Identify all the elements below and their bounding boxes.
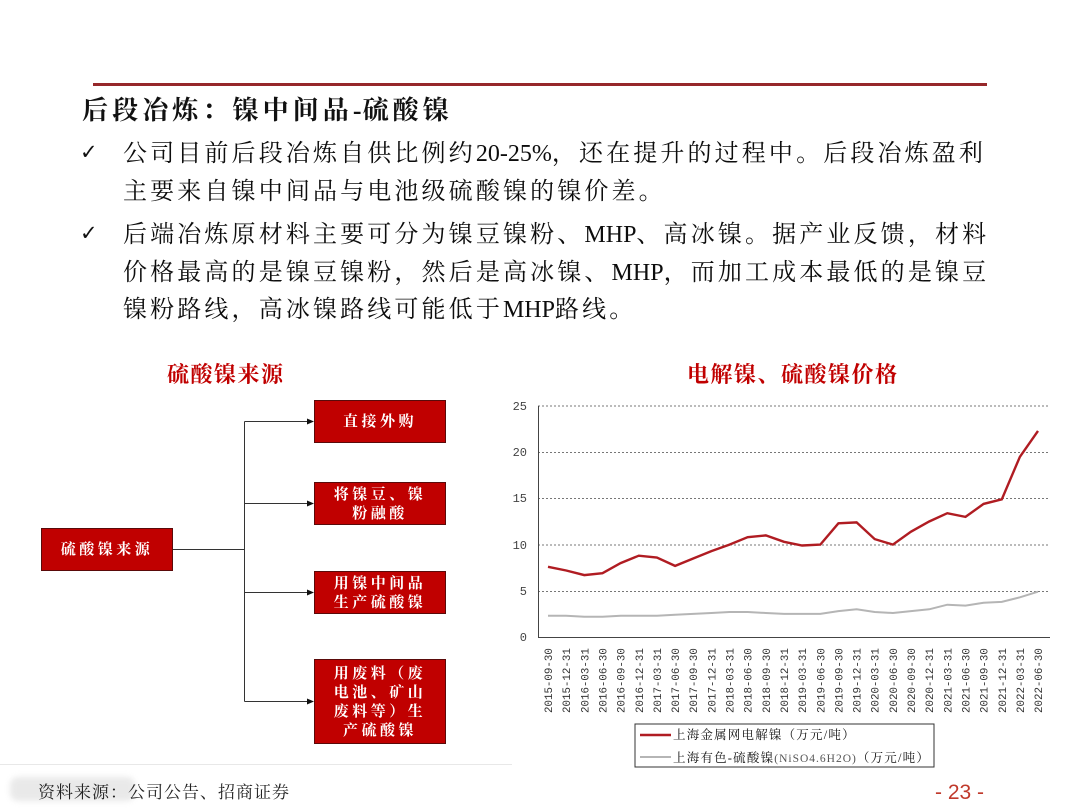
series: electrolytic nickel	[548, 431, 1038, 575]
legend	[635, 724, 934, 767]
heading: nickel sulfate sources: 硫酸镍来源	[167, 362, 285, 387]
bullet 1 line 2: 主要来自镍中间品与电池级硫酸镍的镍价差。	[123, 179, 666, 205]
bullet 2 line 1: 后端冶炼原材料主要可分为镍豆镍粉、MHP、高冰镍。据产业反馈，材料	[123, 222, 989, 248]
box: nickel bean/powder: 将镍豆、镍	[334, 486, 426, 502]
page number: - 23 -	[935, 781, 984, 804]
box: recycled: 产硫酸镍	[343, 722, 417, 738]
series: sulfate	[548, 592, 1038, 617]
x axis labels: 2017-12-31	[707, 648, 719, 713]
x axis labels: 2020-12-31	[925, 648, 937, 713]
watermark	[10, 777, 135, 801]
box: intermediate: 用镍中间品	[334, 576, 426, 592]
legend: 上海有色-硫酸镍(NiSO4.6H2O)（万元/吨）	[673, 750, 930, 765]
x axis labels: 2016-12-31	[635, 648, 647, 713]
y axis labels: 20	[513, 446, 527, 460]
x axis labels: 2017-03-31	[653, 648, 665, 713]
y axis labels: 0	[520, 631, 527, 645]
x axis labels: 2016-03-31	[580, 648, 592, 713]
x axis labels: 2020-03-31	[871, 648, 883, 713]
heading: prices: 电解镍、硫酸镍价格	[687, 362, 899, 387]
x axis labels: 2020-06-30	[889, 648, 901, 713]
x axis labels: 2021-12-31	[998, 648, 1010, 713]
bullet 1 line 1: 公司目前后段冶炼自供比例约20-25%，还在提升的过程中。后段冶炼盈利	[123, 141, 986, 167]
y axis labels: 15	[513, 492, 527, 506]
x axis labels: 2021-03-31	[943, 648, 955, 713]
box: recycled: 电池、矿山	[334, 684, 426, 700]
y axis labels: 5	[520, 585, 527, 599]
box: direct purchase	[314, 400, 446, 443]
x axis labels: 2016-06-30	[598, 648, 610, 713]
bullet list	[80, 140, 989, 323]
box: nickel bean/powder	[314, 482, 446, 525]
bullet 2 line 2: 价格最高的是镍豆镍粉，然后是高冰镍、MHP，而加工成本最低的是镍豆	[123, 260, 989, 286]
x axis labels: 2016-09-30	[617, 648, 629, 713]
x axis labels: 2017-09-30	[689, 648, 701, 713]
x axis labels: 2018-06-30	[744, 648, 756, 713]
y axis labels: 25	[513, 400, 527, 414]
legend: 上海金属网电解镍（万元/吨）	[673, 727, 856, 742]
box: root	[41, 528, 173, 571]
x axis labels: 2015-09-30	[544, 648, 556, 713]
icon: check 2: ✓	[80, 221, 98, 245]
box: nickel bean/powder: 粉融酸	[352, 506, 408, 522]
x axis labels: 2017-06-30	[671, 648, 683, 713]
x axis labels: 2021-06-30	[962, 648, 974, 713]
header rule	[93, 83, 987, 86]
bullet 2 line 3: 镍粉路线，高冰镍路线可能低于MHP路线。	[123, 297, 636, 323]
x axis labels: 2018-03-31	[726, 648, 738, 713]
y axis labels	[513, 400, 527, 645]
x axis labels: 2018-12-31	[780, 648, 792, 713]
x axis labels: 2018-09-30	[762, 648, 774, 713]
x axis labels: 2021-09-30	[980, 648, 992, 713]
x axis labels: 2019-03-31	[798, 648, 810, 713]
x axis labels: 2015-12-31	[562, 648, 574, 713]
box: intermediate	[314, 571, 446, 614]
x axis labels: 2019-09-30	[834, 648, 846, 713]
box: recycled: 用废料（废	[334, 666, 426, 682]
icon: check 1: ✓	[80, 140, 98, 164]
title: 后段冶炼：镍中间品-硫酸镍	[82, 96, 453, 125]
box: direct purchase: 直接外购	[343, 414, 417, 430]
x axis labels: 2019-06-30	[816, 648, 828, 713]
x axis labels: 2022-03-31	[1016, 648, 1028, 713]
x axis labels: 2022-06-30	[1034, 648, 1046, 713]
x axis labels	[544, 648, 1046, 713]
box: recycled	[314, 659, 446, 744]
x axis labels: 2020-09-30	[907, 648, 919, 713]
x axis labels: 2019-12-31	[853, 648, 865, 713]
footer divider	[0, 764, 512, 765]
source note: 资料来源：公司公告、招商证券	[38, 783, 290, 802]
y axis labels: 10	[513, 539, 527, 553]
box: recycled: 废料等）生	[334, 704, 426, 720]
box: root: 硫酸镍来源	[61, 542, 153, 558]
box: intermediate: 生产硫酸镍	[334, 594, 426, 610]
